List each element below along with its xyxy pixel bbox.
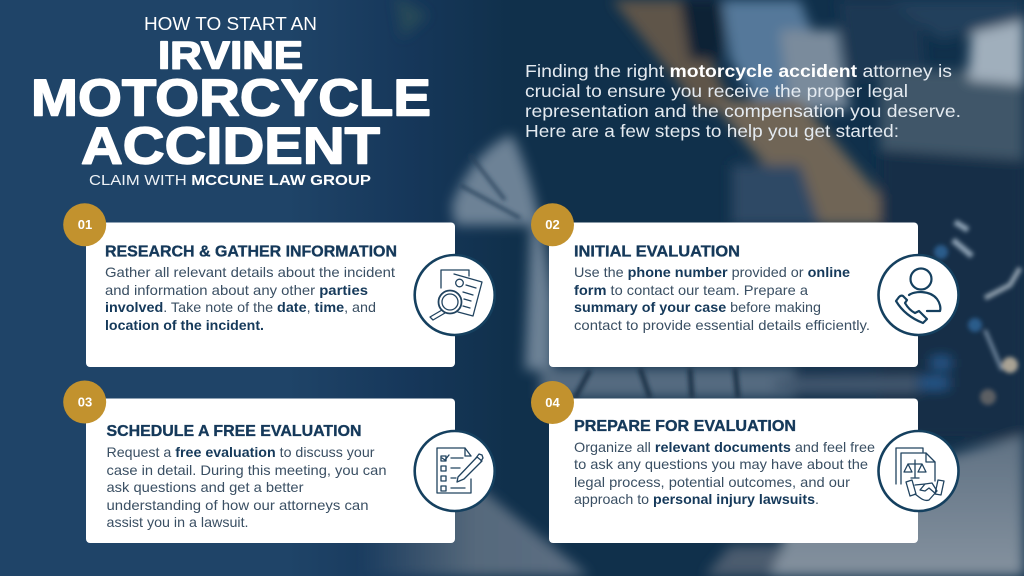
heading 01: RESEARCH & GATHER INFORMATION <box>105 244 397 260</box>
body 01: location of the incident. <box>105 318 264 333</box>
panel: step 01 research <box>63 203 495 367</box>
badge 03 <box>63 380 106 424</box>
badge 01 <box>63 203 106 246</box>
panel: step 02 evaluation <box>531 203 958 367</box>
body 01: involved. Take note of the date, time, and <box>105 300 376 315</box>
body 04 <box>574 440 875 507</box>
body 01: Gather all relevant details about the incident <box>105 265 395 280</box>
intro paragraph <box>525 61 961 141</box>
body 01 <box>105 265 395 333</box>
icon: legal documents and handshake <box>878 431 958 511</box>
title block: HOW TO START AN <box>144 14 317 34</box>
heading 04: PREPARE FOR EVALUATION <box>574 418 796 435</box>
body 01: and information about any other parties <box>105 283 368 298</box>
intro paragraph: Here are a few steps to help you get started: <box>525 121 899 141</box>
tire tread patch <box>452 135 552 370</box>
body 03: Request a free evaluation to discuss your <box>106 445 375 460</box>
body 04: approach to personal injury lawsuits . <box>574 492 819 507</box>
badge 02: 02 <box>545 217 560 232</box>
panel: step 04 prepare <box>531 381 958 543</box>
icon: person with phone <box>878 255 958 335</box>
body 04: Organize all relevant documents and feel free <box>574 440 875 455</box>
title block: ACCIDENT <box>81 118 380 176</box>
body 04: legal process, potential outcomes, and our <box>574 475 850 490</box>
body 04: to ask any questions you may have about the <box>574 457 868 472</box>
body 03: assist you in a lawsuit. <box>106 515 248 530</box>
body 02 <box>574 265 870 333</box>
badge 01: 01 <box>78 217 92 232</box>
intro paragraph: Finding the right motorcycle accident attorney is <box>525 61 952 81</box>
icon: checklist and pen <box>415 431 495 511</box>
body 03 <box>106 445 386 530</box>
body 02: Use the phone number provided or online <box>574 265 850 280</box>
title block: CLAIM WITH MCCUNE LAW GROUP <box>89 172 371 189</box>
title block: IRVINE <box>158 34 303 78</box>
title block: MOTORCYCLE <box>31 70 431 128</box>
body 02: form to contact our team. Prepare a <box>574 283 808 298</box>
badge 04 <box>531 381 574 424</box>
heading 02: INITIAL EVALUATION <box>574 244 740 260</box>
intro paragraph: crucial to ensure you receive the proper legal <box>525 81 908 101</box>
panel: step 03 schedule <box>63 380 495 543</box>
body 03: case in detail. During this meeting, you can <box>106 463 386 478</box>
body 02: summary of your case before making <box>574 300 821 315</box>
icon: documents and magnifier <box>415 255 495 335</box>
heading 03: SCHEDULE A FREE EVALUATION <box>106 423 362 440</box>
badge 04: 04 <box>545 395 560 410</box>
badge 02 <box>531 203 574 246</box>
title block <box>31 14 431 189</box>
body 02: contact to provide essential details efficiently. <box>574 318 870 333</box>
body 03: ask questions and get a better <box>106 480 304 495</box>
badge 03: 03 <box>78 394 92 410</box>
body 03: understanding of how our attorneys can <box>106 498 368 513</box>
intro paragraph: representation and the compensation you deserve. <box>525 101 961 121</box>
